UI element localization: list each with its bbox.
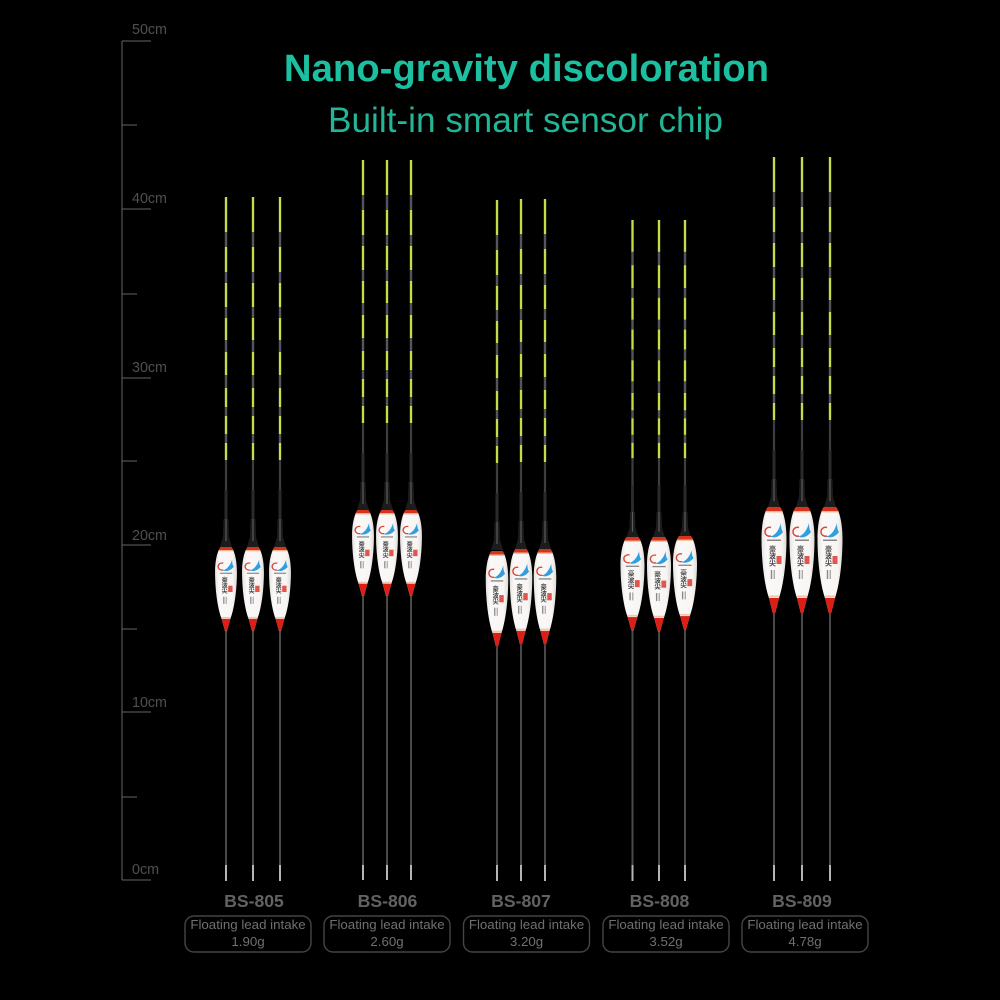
title: Nano-gravity discoloration bbox=[284, 47, 769, 90]
spec box: BS-806: 2.60g bbox=[370, 934, 404, 949]
spec box: BS-809: 4.78g bbox=[788, 934, 822, 949]
ruler: height scale in cm: 50cm bbox=[132, 22, 167, 38]
float group: BS-808 bbox=[619, 220, 698, 881]
model label: BS-805: BS-805 bbox=[224, 891, 284, 911]
float group: BS-806 bbox=[351, 160, 423, 880]
spec box: BS-805: 1.90g bbox=[231, 934, 265, 949]
ruler: height scale in cm: 0cm bbox=[132, 862, 159, 878]
spec box: BS-807 bbox=[464, 916, 590, 952]
spec box: BS-805 bbox=[185, 916, 311, 952]
spec box: BS-808 bbox=[603, 916, 729, 952]
float group: BS-805 bbox=[214, 197, 292, 881]
spec box: BS-807: Floating lead intake bbox=[469, 917, 584, 932]
model label: BS-809: BS-809 bbox=[772, 891, 832, 911]
spec box: BS-806: Floating lead intake bbox=[329, 917, 445, 932]
spec box: BS-806 bbox=[324, 916, 450, 952]
spec box: BS-809 bbox=[742, 916, 868, 952]
ruler: height scale in cm: 10cm bbox=[132, 695, 167, 711]
spec box: BS-808: 3.52g bbox=[649, 934, 683, 949]
model label: BS-806: BS-806 bbox=[358, 891, 418, 911]
spec box: BS-809: Floating lead intake bbox=[747, 917, 863, 932]
ruler: height scale in cm bbox=[122, 22, 167, 880]
model label: BS-807: BS-807 bbox=[491, 891, 551, 911]
float group: BS-807 bbox=[484, 199, 558, 881]
spec box: BS-808: Floating lead intake bbox=[608, 917, 724, 932]
ruler: height scale in cm: 20cm bbox=[132, 528, 167, 544]
ruler: height scale in cm: 30cm bbox=[132, 360, 167, 376]
float group: BS-809 bbox=[760, 157, 844, 881]
spec box: BS-807: 3.20g bbox=[510, 934, 543, 949]
model label: BS-808: BS-808 bbox=[630, 891, 690, 911]
subtitle: Built-in smart sensor chip bbox=[328, 101, 723, 140]
ruler: height scale in cm: 40cm bbox=[132, 191, 167, 207]
spec box: BS-805: Floating lead intake bbox=[190, 917, 306, 932]
